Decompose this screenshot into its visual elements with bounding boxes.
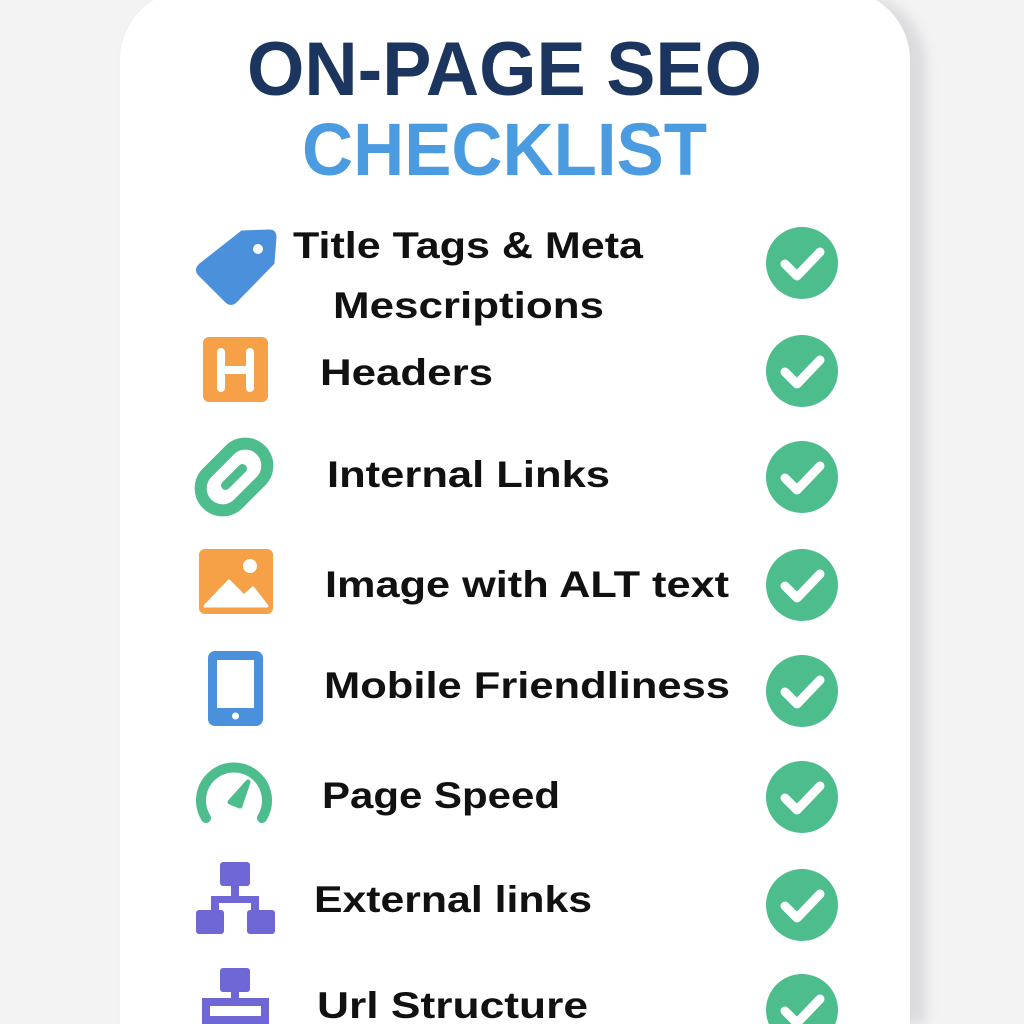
row: external links — [196, 862, 592, 934]
text: mobile: Mobile Friendliness — [324, 665, 730, 706]
row: image — [199, 549, 729, 614]
icon: gauge — [201, 768, 267, 818]
row: url structure — [202, 968, 588, 1024]
row: mobile — [208, 651, 730, 726]
text: internal links: Internal Links — [327, 454, 610, 495]
icon: sitemap — [196, 862, 275, 934]
text: external links: External links — [314, 879, 592, 920]
text: title tags: Mescriptions — [333, 285, 604, 326]
row: internal links — [192, 435, 610, 519]
text: title tags: Title Tags & Meta — [293, 225, 643, 266]
icon: tag — [198, 231, 275, 304]
text: page speed: Page Speed — [322, 775, 560, 816]
title: ON-PAGE SEO — [247, 27, 762, 112]
text: headers: Headers — [320, 352, 493, 393]
icon: link — [194, 438, 274, 516]
icon: H — [203, 337, 268, 402]
card — [120, 0, 926, 1024]
icon: image — [199, 549, 273, 614]
title — [250, 42, 759, 176]
text: image: Image with ALT text — [325, 564, 729, 605]
icon: url — [202, 968, 269, 1024]
row: headers — [203, 337, 493, 402]
row: title tags — [198, 225, 643, 326]
title: CHECKLIST — [302, 108, 707, 191]
icon: phone — [208, 651, 263, 726]
row: page speed — [201, 768, 560, 818]
text: title tags — [293, 225, 643, 326]
check icons — [766, 227, 838, 1024]
